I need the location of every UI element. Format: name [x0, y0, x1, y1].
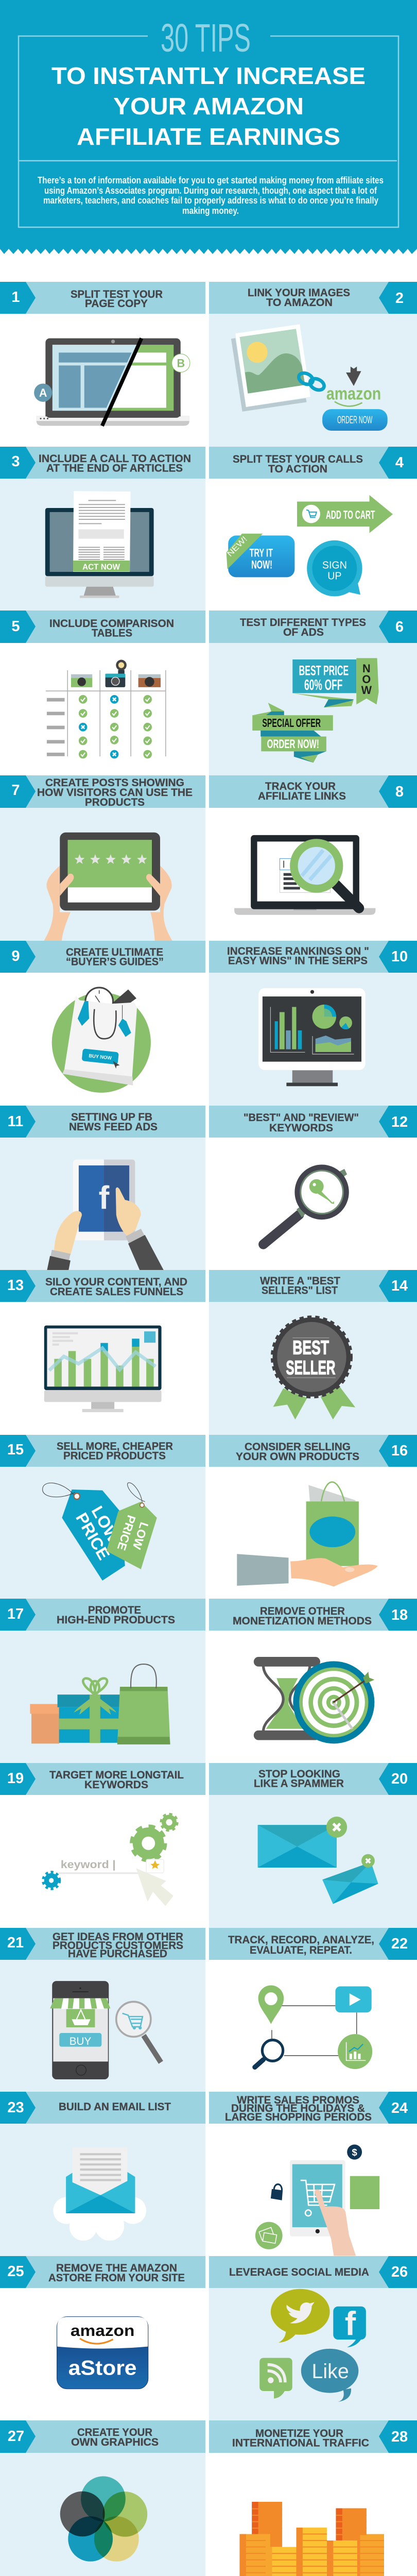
banner 17: 17	[7, 1606, 24, 1622]
icon: comparison table	[46, 660, 166, 758]
icon: keyword gears and cursor: keyword |	[61, 1859, 116, 1871]
banner 12	[209, 1106, 417, 1138]
banner 1	[0, 282, 205, 314]
icon: shopping bag on green circle: BUY NOW	[89, 1053, 112, 1061]
frame	[19, 36, 398, 227]
icon: call to action buttons	[225, 495, 393, 597]
banner 21: 21	[7, 1935, 24, 1951]
banner 13	[0, 1270, 205, 1302]
banner 23	[0, 2092, 205, 2124]
icon: best seller badge	[272, 1316, 355, 1419]
banner 19: KEYWORDS	[84, 1779, 148, 1791]
tip 25	[0, 2256, 205, 2389]
banner 3: 3	[11, 453, 20, 470]
icon: gift boxes and bag	[30, 1664, 170, 1744]
tip 2	[209, 282, 417, 431]
banner 16: CONSIDER SELLING	[245, 1441, 351, 1453]
banner 22: 22	[391, 1936, 408, 1952]
banner 16: YOUR OWN PRODUCTS	[236, 1451, 359, 1463]
banner 14	[209, 1270, 417, 1302]
title: 30 tips: 30 TIPS	[161, 16, 251, 60]
banner 6: 6	[395, 619, 404, 635]
icon: laptop with magnifier	[234, 835, 375, 915]
banner 21: HAVE PURCHASED	[68, 1948, 167, 1960]
banner 8: AFFILIATE LINKS	[258, 790, 346, 802]
banner 4: SPLIT TEST YOUR CALLS	[233, 453, 363, 465]
icon: shopping bag on green circle	[52, 988, 151, 1093]
banner 8	[209, 775, 417, 808]
tip 12	[209, 1106, 417, 1244]
tip 3	[0, 447, 205, 598]
icon: amazon astore: amazon	[71, 2323, 134, 2340]
icon: ad banners: SPECIAL OFFER	[262, 716, 321, 730]
icon: ad banners	[252, 658, 379, 762]
icon: envelope on cloud	[53, 2147, 146, 2241]
icon: magnifier with key	[263, 1167, 347, 1244]
banner 14: 14	[391, 1278, 408, 1294]
banner 12: "BEST" AND "REVIEW"	[244, 1112, 359, 1124]
banner 7: CREATE POSTS SHOWING	[45, 777, 184, 789]
banner 3	[0, 447, 205, 479]
icon: phone shop	[50, 1981, 161, 2079]
banner 26	[209, 2256, 417, 2288]
icon: ad banners: O	[362, 673, 371, 686]
icon: low price tags: PRICE	[72, 1510, 113, 1563]
banner 22	[209, 1928, 417, 1960]
icon: sales chart monitor	[44, 1326, 162, 1412]
tip 4	[209, 447, 417, 597]
banner 8: TRACK YOUR	[265, 781, 336, 792]
banner 27: OWN GRAPHICS	[71, 2436, 159, 2448]
tip 27	[0, 2420, 205, 2562]
icon: photo linked to amazon	[231, 324, 388, 431]
tip 6	[209, 611, 417, 762]
icon: best seller badge: BEST	[292, 1336, 329, 1359]
banner 1: SPLIT TEST YOUR	[71, 289, 163, 300]
banner 2: TO AMAZON	[266, 297, 333, 309]
icon: monitor with article	[45, 491, 154, 598]
banner 28	[209, 2420, 417, 2453]
tip 19	[0, 1763, 205, 1906]
intro paragraph	[38, 175, 384, 216]
banner 15	[0, 1435, 205, 1467]
tip 16	[209, 1435, 417, 1586]
icon: monitor with article: ACT NOW	[82, 563, 120, 571]
banner 25: ASTORE FROM YOUR SITE	[48, 2272, 185, 2284]
icon: low price tags: LOW	[88, 1503, 123, 1546]
banner 26: LEVERAGE SOCIAL MEDIA	[229, 2266, 369, 2278]
banner 19: 19	[7, 1770, 24, 1787]
icon: analytics monitor	[258, 988, 366, 1086]
banner 10	[209, 941, 417, 973]
banner 4: 4	[395, 454, 404, 471]
title: TO INSTANTLY INCREASE	[51, 62, 366, 89]
tip 23	[0, 2092, 205, 2241]
icon: social media bubbles	[259, 2289, 366, 2402]
banner 20: LIKE A SPAMMER	[254, 1777, 344, 1790]
banner 27: 27	[8, 2428, 24, 2445]
banner 17: HIGH-END PRODUCTS	[57, 1614, 175, 1626]
banner 2: LINK YOUR IMAGES	[248, 287, 350, 299]
banner 13: CREATE SALES FUNNELS	[50, 1286, 183, 1298]
icon: call to action buttons: UP	[327, 570, 342, 582]
tip 18	[209, 1599, 417, 1743]
banner 15: PRICED PRODUCTS	[63, 1450, 166, 1462]
icon: call to action buttons: TRY IT	[250, 547, 273, 560]
banner 27	[0, 2420, 205, 2453]
icon: spam envelopes	[258, 1817, 378, 1904]
banner 18	[209, 1599, 417, 1631]
icon: ad banners: ORDER NOW!	[267, 737, 319, 751]
icon: tablet with facebook: f	[99, 1180, 110, 1216]
icon: call to action buttons: ADD TO CART	[326, 508, 375, 521]
banner 13: SILO YOUR CONTENT, AND	[45, 1276, 187, 1288]
tip 24	[209, 2092, 417, 2256]
banner 18: REMOVE OTHER	[260, 1605, 345, 1617]
banner 11	[0, 1106, 205, 1138]
banner 12: KEYWORDS	[269, 1122, 333, 1134]
icon: laptop A/B split: A	[39, 386, 47, 399]
banner 24	[209, 2092, 417, 2124]
icon: tracking loop	[255, 1985, 372, 2069]
banner 5: 5	[11, 618, 20, 635]
tip 9	[0, 941, 205, 1093]
icon: phone shop: BUY	[70, 2036, 91, 2047]
banner 10: 10	[391, 948, 408, 965]
tip 11	[0, 1106, 205, 1270]
banner 25	[0, 2256, 205, 2288]
tip 14	[209, 1270, 417, 1419]
banner 6	[209, 611, 417, 643]
icon: social media bubbles: Like	[311, 2360, 349, 2383]
banner 21: GET IDEAS FROM OTHER	[53, 1931, 183, 1943]
banner 17: PROMOTE	[88, 1604, 141, 1616]
icon: call to action buttons: NOW!	[251, 558, 272, 571]
banner 4	[209, 447, 417, 479]
icon: amazon astore	[57, 2317, 148, 2389]
banner 7: HOW VISITORS CAN USE THE	[37, 787, 193, 799]
header	[0, 0, 417, 254]
banner 13: 13	[7, 1277, 24, 1294]
banner 28: INTERNATIONAL TRAFFIC	[232, 2437, 369, 2449]
title: AFFILIATE EARNINGS	[77, 123, 340, 150]
banner 18: 18	[391, 1607, 408, 1623]
icon: tablet checkout	[255, 2144, 379, 2256]
banner 27: CREATE YOUR	[77, 2427, 152, 2438]
icon: amazon astore: aStore	[68, 2357, 137, 2380]
tip 8	[209, 775, 417, 915]
icon: social media bubbles: f	[345, 2304, 356, 2342]
banner 25: REMOVE THE AMAZON	[56, 2262, 177, 2274]
banner 9: CREATE ULTIMATE	[66, 946, 163, 958]
tip 15	[0, 1435, 205, 1581]
banner 22: TRACK, RECORD, ANALYZE,	[228, 1934, 374, 1946]
banner 22: EVALUATE, REPEAT.	[250, 1944, 352, 1956]
banner 4: TO ACTION	[268, 463, 327, 475]
icon: low price tags: LOW	[130, 1520, 151, 1551]
banner 24: DURING THE HOLIDAYS &	[231, 2103, 365, 2114]
tip 7	[0, 775, 205, 941]
icon: ad banners: N	[362, 662, 371, 675]
icon: photo linked to amazon: amazon	[326, 384, 381, 403]
banner 28: MONETIZE YOUR	[255, 2428, 343, 2439]
title	[51, 62, 366, 150]
banner 24: LARGE SHOPPING PERIODS	[225, 2111, 372, 2123]
zigzag edge	[0, 249, 417, 254]
icon: tablet checkout: $	[352, 2147, 357, 2158]
icon: keyword gears and cursor	[43, 1814, 178, 1906]
tip 26	[209, 2256, 417, 2402]
banner 9: “BUYER’S GUIDES”	[66, 956, 164, 968]
icon: laptop A/B split: B	[177, 357, 185, 370]
banner 25: 25	[7, 2263, 24, 2280]
banner 15: 15	[7, 1442, 24, 1458]
banner 23: BUILD AN EMAIL LIST	[59, 2101, 171, 2113]
icon: low price tags: PRICE	[115, 1514, 138, 1552]
icon: call to action buttons: NEW!	[225, 535, 249, 558]
tip 17	[0, 1599, 205, 1744]
banner 15: SELL MORE, CHEAPER	[57, 1440, 173, 1452]
icon: call to action buttons: SIGN	[322, 560, 347, 571]
banner 16: 16	[391, 1443, 408, 1459]
tip 28	[209, 2420, 417, 2576]
icon: ad banners: W	[361, 684, 372, 697]
title: YOUR AMAZON	[113, 93, 304, 120]
icon: tablet with facebook	[47, 1160, 164, 1270]
icon: hourglass and target	[254, 1657, 374, 1743]
banner 6: OF ADS	[283, 626, 324, 638]
banner 19: TARGET MORE LONGTAIL	[49, 1769, 184, 1781]
banner 14: WRITE A "BEST	[260, 1275, 340, 1287]
banner 5: INCLUDE COMPARISON	[49, 618, 174, 630]
banner 7: PRODUCTS	[85, 796, 145, 808]
banner 2: 2	[395, 290, 404, 307]
banner 10: EASY WINS" IN THE SERPS	[228, 955, 368, 967]
banner 11: 11	[8, 1113, 23, 1130]
icon: coin stacks	[239, 2502, 384, 2576]
banner 18: MONETIZATION METHODS	[233, 1615, 372, 1627]
icon: hands holding tablet	[44, 833, 172, 941]
icon: laptop A/B split	[34, 338, 190, 426]
banner 24: 24	[391, 2100, 408, 2116]
tip 20	[209, 1763, 417, 1904]
tip 22	[209, 1928, 417, 2069]
banner 3: INCLUDE A CALL TO ACTION	[39, 453, 191, 465]
icon: low price tags	[43, 1483, 157, 1581]
banner 11: NEWS FEED ADS	[69, 1121, 158, 1133]
icon: photo linked to amazon: ORDER NOW	[337, 414, 372, 426]
tip 5	[0, 611, 205, 758]
icon: hand holding bag	[237, 1482, 378, 1586]
banner 9: 9	[11, 948, 20, 964]
banner 16	[209, 1435, 417, 1467]
banner 24: WRITE SALES PROMOS	[237, 2094, 359, 2106]
icon: best seller badge: SELLER	[286, 1357, 335, 1378]
banner 21	[0, 1928, 205, 1960]
banner 6: TEST DIFFERENT TYPES	[240, 617, 366, 629]
banner 20: STOP LOOKING	[258, 1768, 340, 1780]
banner 21: PRODUCTS CUSTOMERS	[53, 1940, 183, 1952]
banner 7	[0, 775, 205, 808]
banner 12: 12	[391, 1114, 408, 1130]
tip 13	[0, 1270, 205, 1412]
banner 7: 7	[11, 782, 20, 799]
banner 20	[209, 1763, 417, 1795]
banner 20: 20	[391, 1771, 408, 1787]
banner 3: AT THE END OF ARTICLES	[46, 463, 183, 474]
banner 11: SETTING UP FB	[71, 1111, 152, 1123]
intro paragraph: making money.	[182, 206, 239, 216]
banner 1: 1	[11, 289, 20, 306]
banner 19	[0, 1763, 205, 1795]
banner 5	[0, 611, 205, 643]
banner 10: INCREASE RANKINGS ON "	[227, 945, 369, 957]
banner 2	[209, 282, 417, 314]
tip 21	[0, 1928, 205, 2079]
icon: overlapping circles	[60, 2476, 147, 2562]
banner 17	[0, 1599, 205, 1631]
banner 9	[0, 941, 205, 973]
tip 1	[0, 282, 205, 426]
banner 28: 28	[391, 2429, 408, 2445]
icon: ad banners: BEST PRICE	[299, 663, 349, 678]
banner 23: 23	[7, 2099, 24, 2116]
tip 10	[209, 941, 417, 1086]
icon: ad banners: 60% OFF	[304, 677, 342, 693]
banner 5: TABLES	[92, 628, 132, 639]
banner 26: 26	[391, 2264, 408, 2280]
banner 1: PAGE COPY	[85, 298, 148, 310]
banner 14: SELLERS" LIST	[262, 1285, 338, 1296]
banner 8: 8	[395, 784, 404, 800]
